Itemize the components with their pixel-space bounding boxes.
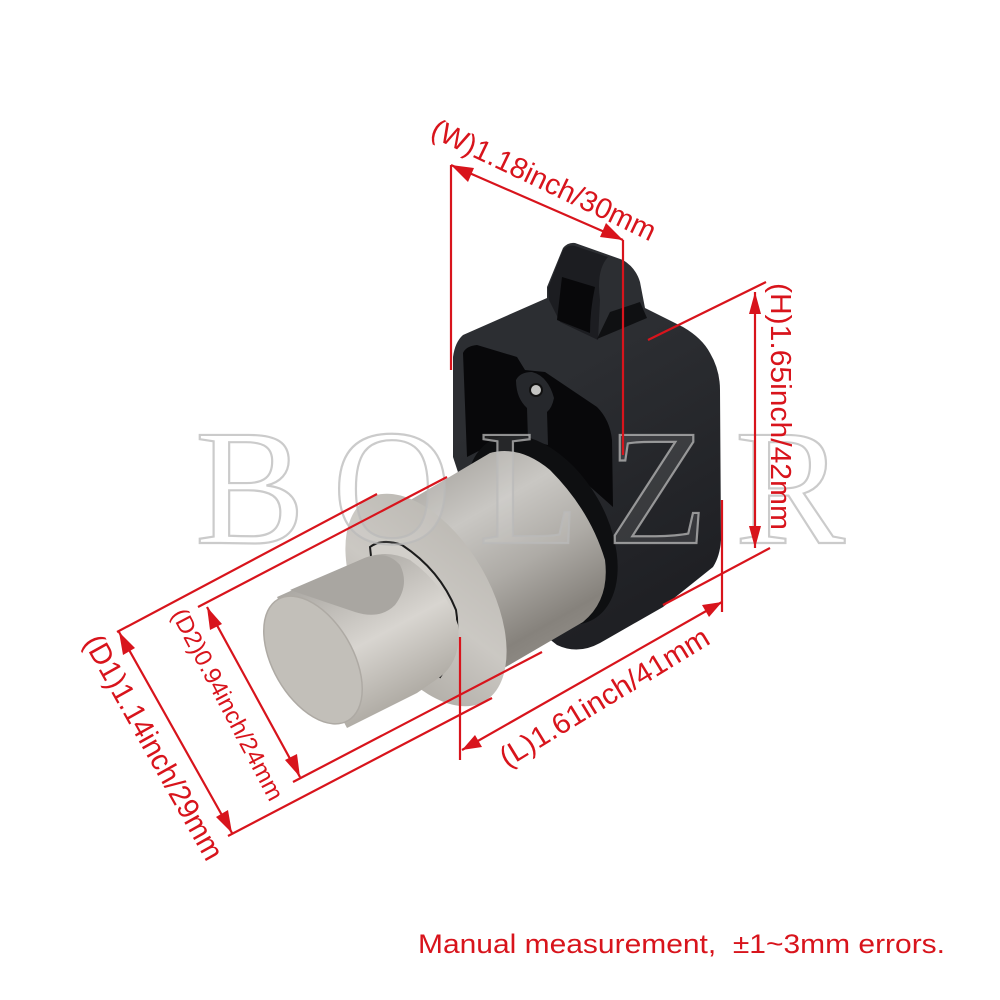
- D2 dimension lines: [198, 477, 542, 782]
- flange inner ring: [370, 542, 457, 677]
- arrowheads: [119, 165, 761, 833]
- length dimension lines: [460, 500, 722, 760]
- width label: (W)1.18inch/30mm: [426, 113, 661, 248]
- D1 dimension lines: [117, 494, 492, 836]
- knob body: [277, 554, 459, 728]
- width dimension lines: [451, 165, 623, 455]
- collar around cylinder: [435, 409, 649, 651]
- brushed metal cylinder: [385, 451, 606, 685]
- tab socket: [597, 302, 647, 339]
- length label: (L)1.61inch/41mm: [494, 622, 715, 774]
- product: push button latch: [243, 243, 721, 741]
- black housing: [453, 243, 721, 650]
- D2 label: (D2)0.94inch/24mm: [166, 604, 289, 805]
- tab front face: [548, 246, 608, 340]
- height label: (H)1.65inch/42mm: [764, 283, 796, 530]
- flange: [312, 467, 540, 733]
- housing tab slot: [557, 277, 595, 333]
- D1 label: (D1)1.14inch/29mm: [77, 629, 229, 866]
- height dimension lines: [648, 282, 770, 605]
- front cavity: [463, 345, 613, 507]
- screw tongue: [516, 372, 554, 445]
- dimension lines: [117, 165, 770, 836]
- watermark: BOLZR: [195, 396, 845, 579]
- knob recess: [290, 555, 404, 615]
- measurement note: Manual measurement, ±1~3mm errors.: [418, 929, 945, 959]
- knob end face: [243, 579, 383, 741]
